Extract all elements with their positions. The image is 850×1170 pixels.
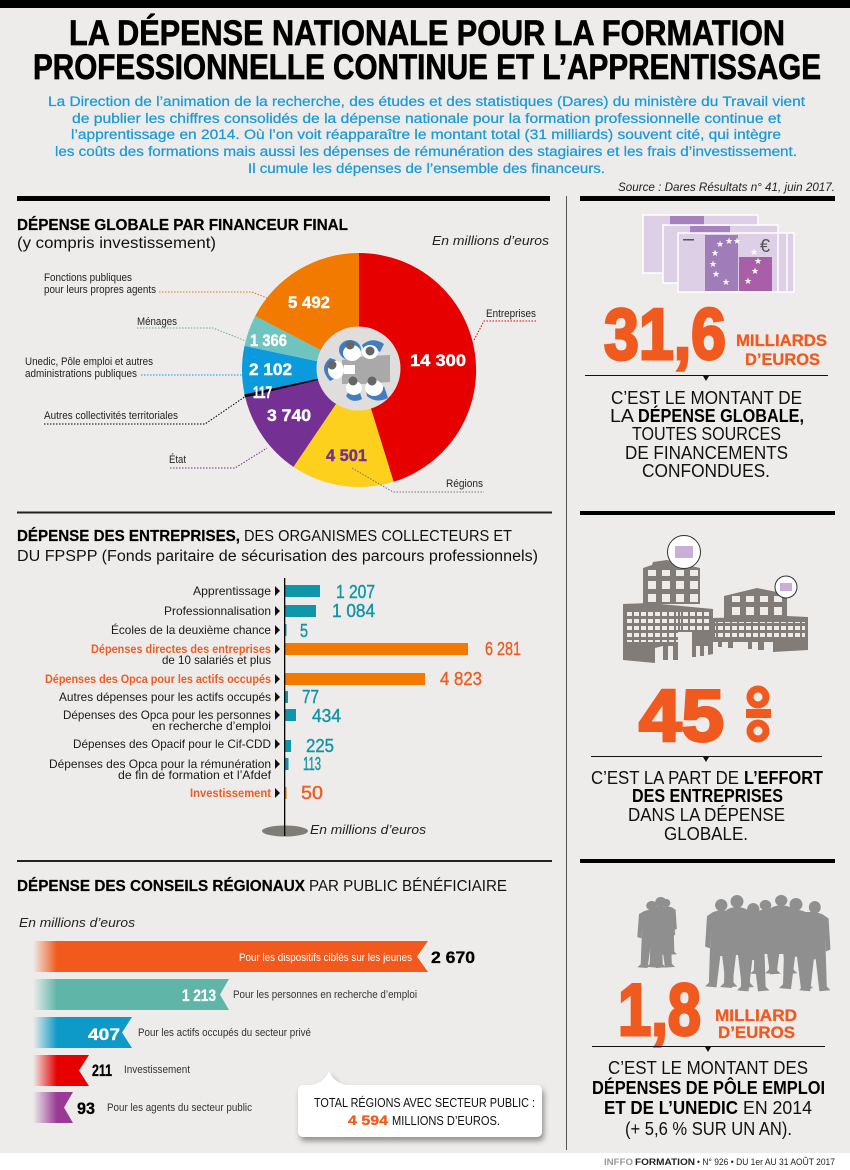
ribbon: recherche d'emploi: [33, 979, 417, 1010]
bar labels: de fin de formation et l’Afdef: [118, 768, 272, 782]
ribbon: recherche d'emploi: 1 213: [182, 986, 216, 1005]
text block: DES ENTREPRISES: [632, 786, 783, 806]
unit: D’EUROS: [745, 350, 820, 369]
icon: banknotes: ★: [750, 248, 758, 258]
top black band: [0, 0, 850, 8]
pie labels: Régions: [446, 478, 483, 490]
bar values: 50: [301, 783, 323, 803]
bar labels: Dépenses des Opca pour la rémunération: [49, 757, 271, 771]
footer: INFFO: [604, 1157, 633, 1168]
pie values: 5 492: [288, 293, 330, 312]
bar values: 4 823: [440, 669, 482, 689]
bar labels: Écoles de la deuxième chance: [111, 622, 271, 637]
bar labels: Dépenses des Opca pour les personnes: [63, 708, 271, 722]
bar labels: en recherche d’emploi: [152, 719, 271, 733]
pie values: [249, 293, 466, 465]
bar values: 1 084: [332, 601, 375, 621]
text block: C’EST LA PART DE: [591, 768, 739, 788]
big number: 31,6: [604, 295, 726, 375]
icon: banknotes: [643, 215, 794, 292]
ribbon: jeunes: 2 670: [431, 948, 475, 967]
label arrows: [275, 586, 280, 798]
bar values: 434: [312, 706, 341, 726]
icon: banknotes: ★: [744, 277, 752, 287]
text block: LA: [610, 406, 634, 426]
icon: banknotes: €: [760, 236, 770, 256]
heading: dépense des entreprises: DU FPSPP (Fonds paritaire de sécurisation des parcours professionnels): [17, 548, 538, 565]
text block: DÉPENSES DE PÔLE EMPLOI: [592, 1077, 825, 1098]
bar labels: Dépenses directes des entreprises: [91, 642, 271, 656]
pie labels: pour leurs propres agents: [44, 284, 156, 296]
bar values: 1 207: [336, 582, 375, 602]
pie values: 1 366: [250, 331, 287, 350]
pie labels: Autres collectivités territoriales: [44, 410, 178, 422]
icon: small group of people: [637, 897, 677, 968]
callout: total régions: MILLIONS D’EUROS.: [392, 1114, 500, 1128]
unit label: En millions d’euros: [310, 823, 426, 837]
pie values: 117: [253, 383, 272, 402]
icon: banknotes: ★: [722, 278, 730, 288]
bar values: 113: [303, 754, 321, 774]
unit: [715, 1006, 797, 1042]
text block: L’EFFORT: [744, 768, 823, 788]
pie values: 3 740: [267, 406, 311, 425]
ribbon: jeunes: [33, 941, 475, 972]
pie labels: [25, 272, 536, 490]
unit label: En millions d’euros: [432, 234, 549, 248]
heading: dépense globale: (y compris investissement): [17, 235, 216, 252]
bars: [285, 585, 468, 799]
title: [33, 13, 821, 87]
pie values: 2 102: [249, 360, 292, 379]
text block: [610, 388, 804, 481]
pie values: 14 300: [410, 351, 466, 370]
big number: 1,8: [618, 970, 701, 1051]
callout: total régions: 4 594: [348, 1112, 388, 1128]
ribbon: investissement: [33, 1055, 190, 1086]
ribbon: actifs occupés: 407: [88, 1025, 120, 1044]
bar chart: [45, 578, 521, 837]
ribbon: secteur public: 93: [77, 1099, 95, 1118]
intro text: Il cumule les dépenses de l’ensemble des financeurs.: [248, 161, 605, 176]
footer: [604, 1157, 835, 1168]
percent sign: [746, 689, 771, 739]
bar values: 225: [306, 736, 334, 756]
column divider: [566, 196, 567, 1150]
intro text: La Direction de l’animation de la recherche, des études et des statistiques (Dares) du ministère du Travail vient: [48, 94, 805, 109]
ribbon: investissement: Investissement: [124, 1064, 190, 1076]
bar labels: Dépenses des Opacif pour le Cif-CDD: [73, 737, 271, 751]
ribbon: actifs occupés: [33, 1017, 311, 1048]
bar values: 5: [300, 621, 308, 641]
pie labels: administrations publiques: [25, 368, 137, 380]
bar labels: Investissement: [190, 786, 271, 800]
footer: FORMATION: [635, 1157, 695, 1168]
bar values: 6 281: [485, 639, 521, 659]
pie leader lines: [44, 292, 537, 492]
source: Source : Dares Résultats n° 41, juin 2017.: [618, 182, 835, 194]
panel: 45 %: [580, 511, 835, 844]
text block: [592, 1058, 825, 1139]
text block: DANS LA DÉPENSE: [628, 805, 785, 825]
heading: dépense des entreprises: DES ORGANISMES COLLECTEURS ET: [244, 528, 512, 545]
pie values: 4 501: [326, 446, 367, 465]
heading: conseils régionaux: DÉPENSE DES CONSEILS RÉGIONAUX: [17, 878, 306, 895]
pie labels: Ménages: [137, 316, 177, 328]
text block: C’EST LE MONTANT DES: [608, 1058, 808, 1078]
bar labels: Professionnalisation: [164, 604, 271, 618]
text block: (+ 5,6 % SUR UN AN).: [625, 1119, 792, 1139]
ribbon: jeunes: Pour les dispositifs ciblés sur les jeunes: [239, 952, 412, 964]
icon: buildings: [623, 536, 808, 663]
bar labels: Apprentissage: [193, 584, 271, 598]
unit: MILLIARDS: [736, 331, 827, 350]
bar labels: de 10 salariés et plus: [162, 653, 271, 667]
heading: conseils régionaux: [17, 878, 507, 895]
heading: dépense des entreprises: [17, 528, 538, 565]
intro text: l’apprentissage en 2014. Où l’on voit réapparaître le montant total (31 milliards) souvent cité, qui intègre: [71, 127, 781, 142]
text block: CONFONDUES.: [642, 461, 770, 481]
icon: large group of people: [705, 895, 830, 991]
icon: banknotes: ★: [709, 260, 717, 270]
text block: ET DE L’UNEDIC: [604, 1098, 738, 1118]
unit: MILLIARD: [715, 1006, 797, 1025]
heading: conseils régionaux: PAR PUBLIC BÉNÉFICIAIRE: [309, 878, 507, 895]
bar labels: Autres dépenses pour les actifs occupés: [59, 690, 271, 704]
bar values: 77: [302, 687, 319, 707]
intro text: [48, 94, 805, 176]
panel: 31,6 milliards: [580, 196, 835, 481]
pie labels: Fonctions publiques: [44, 272, 132, 284]
bar labels: [45, 584, 272, 800]
panel: dépense des entreprises: [17, 512, 552, 837]
unit label: En millions d’euros: [19, 916, 135, 930]
big number: 45: [639, 676, 724, 757]
ribbon: secteur public: Pour les agents du secteur public: [107, 1102, 252, 1114]
icon: banknotes: ★: [716, 240, 724, 250]
unit: [736, 331, 827, 369]
panel: 1,8 milliard: [580, 859, 835, 1139]
ribbon: investissement: 211: [92, 1061, 112, 1080]
pie labels: État: [169, 453, 186, 466]
text block: EN 2014: [743, 1098, 812, 1118]
ribbon: secteur public: [33, 1092, 252, 1123]
pie labels: Unedic, Pôle emploi et autres: [25, 356, 153, 368]
ribbon: actifs occupés: Pour les actifs occupés du secteur privé: [138, 1027, 311, 1039]
callout: total régions: [298, 1071, 542, 1137]
footer: • N° 926 • DU 1er AU 31 AOÛT 2017: [697, 1157, 835, 1168]
pie chart: [242, 253, 476, 487]
intro text: de publier les chiffres consolidés de la dépense nationale pour la formation professionnelle continue et: [72, 111, 781, 126]
intro text: les coûts des formations mais aussi les dépenses de rémunération des stagiaires et les frais d’investissement.: [55, 144, 797, 159]
ribbon: recherche d'emploi: Pour les personnes en recherche d’emploi: [233, 989, 417, 1001]
icon: banknotes: ★: [712, 270, 720, 280]
text block: TOUTES SOURCES: [632, 424, 781, 444]
text block: DÉPENSE GLOBALE,: [638, 405, 804, 426]
icon: banknotes: ★: [725, 237, 733, 247]
text block: C’EST LE MONTANT DE: [611, 388, 802, 408]
icon: banknotes: ★: [733, 237, 741, 247]
icon: banknotes: ★: [754, 257, 762, 267]
heading: dépense globale: DÉPENSE GLOBALE PAR FINANCEUR FINAL: [17, 217, 348, 234]
text block: GLOBALE.: [664, 824, 748, 844]
heading: dépense globale: [17, 217, 348, 252]
icon: meeting table seen from above: [316, 326, 400, 410]
panel: dépense globale par financeur final: [17, 196, 550, 492]
unit: D’EUROS: [718, 1023, 795, 1042]
chart base: [262, 826, 308, 836]
heading: dépense des entreprises: DÉPENSE DES ENTREPRISES,: [17, 528, 240, 545]
text block: DE FINANCEMENTS: [625, 443, 788, 463]
bar labels: Dépenses des Opca pour les actifs occupés: [45, 672, 271, 686]
icon: banknotes: ★: [751, 267, 759, 277]
callout: total régions: TOTAL RÉGIONS AVEC SECTEUR PUBLIC :: [314, 1095, 535, 1110]
icon: banknotes: ★: [711, 249, 719, 259]
bar values: [300, 582, 521, 803]
panel: dépense des conseils régionaux: [17, 860, 552, 1137]
text block: [591, 768, 823, 844]
pie labels: Entreprises: [486, 308, 536, 320]
